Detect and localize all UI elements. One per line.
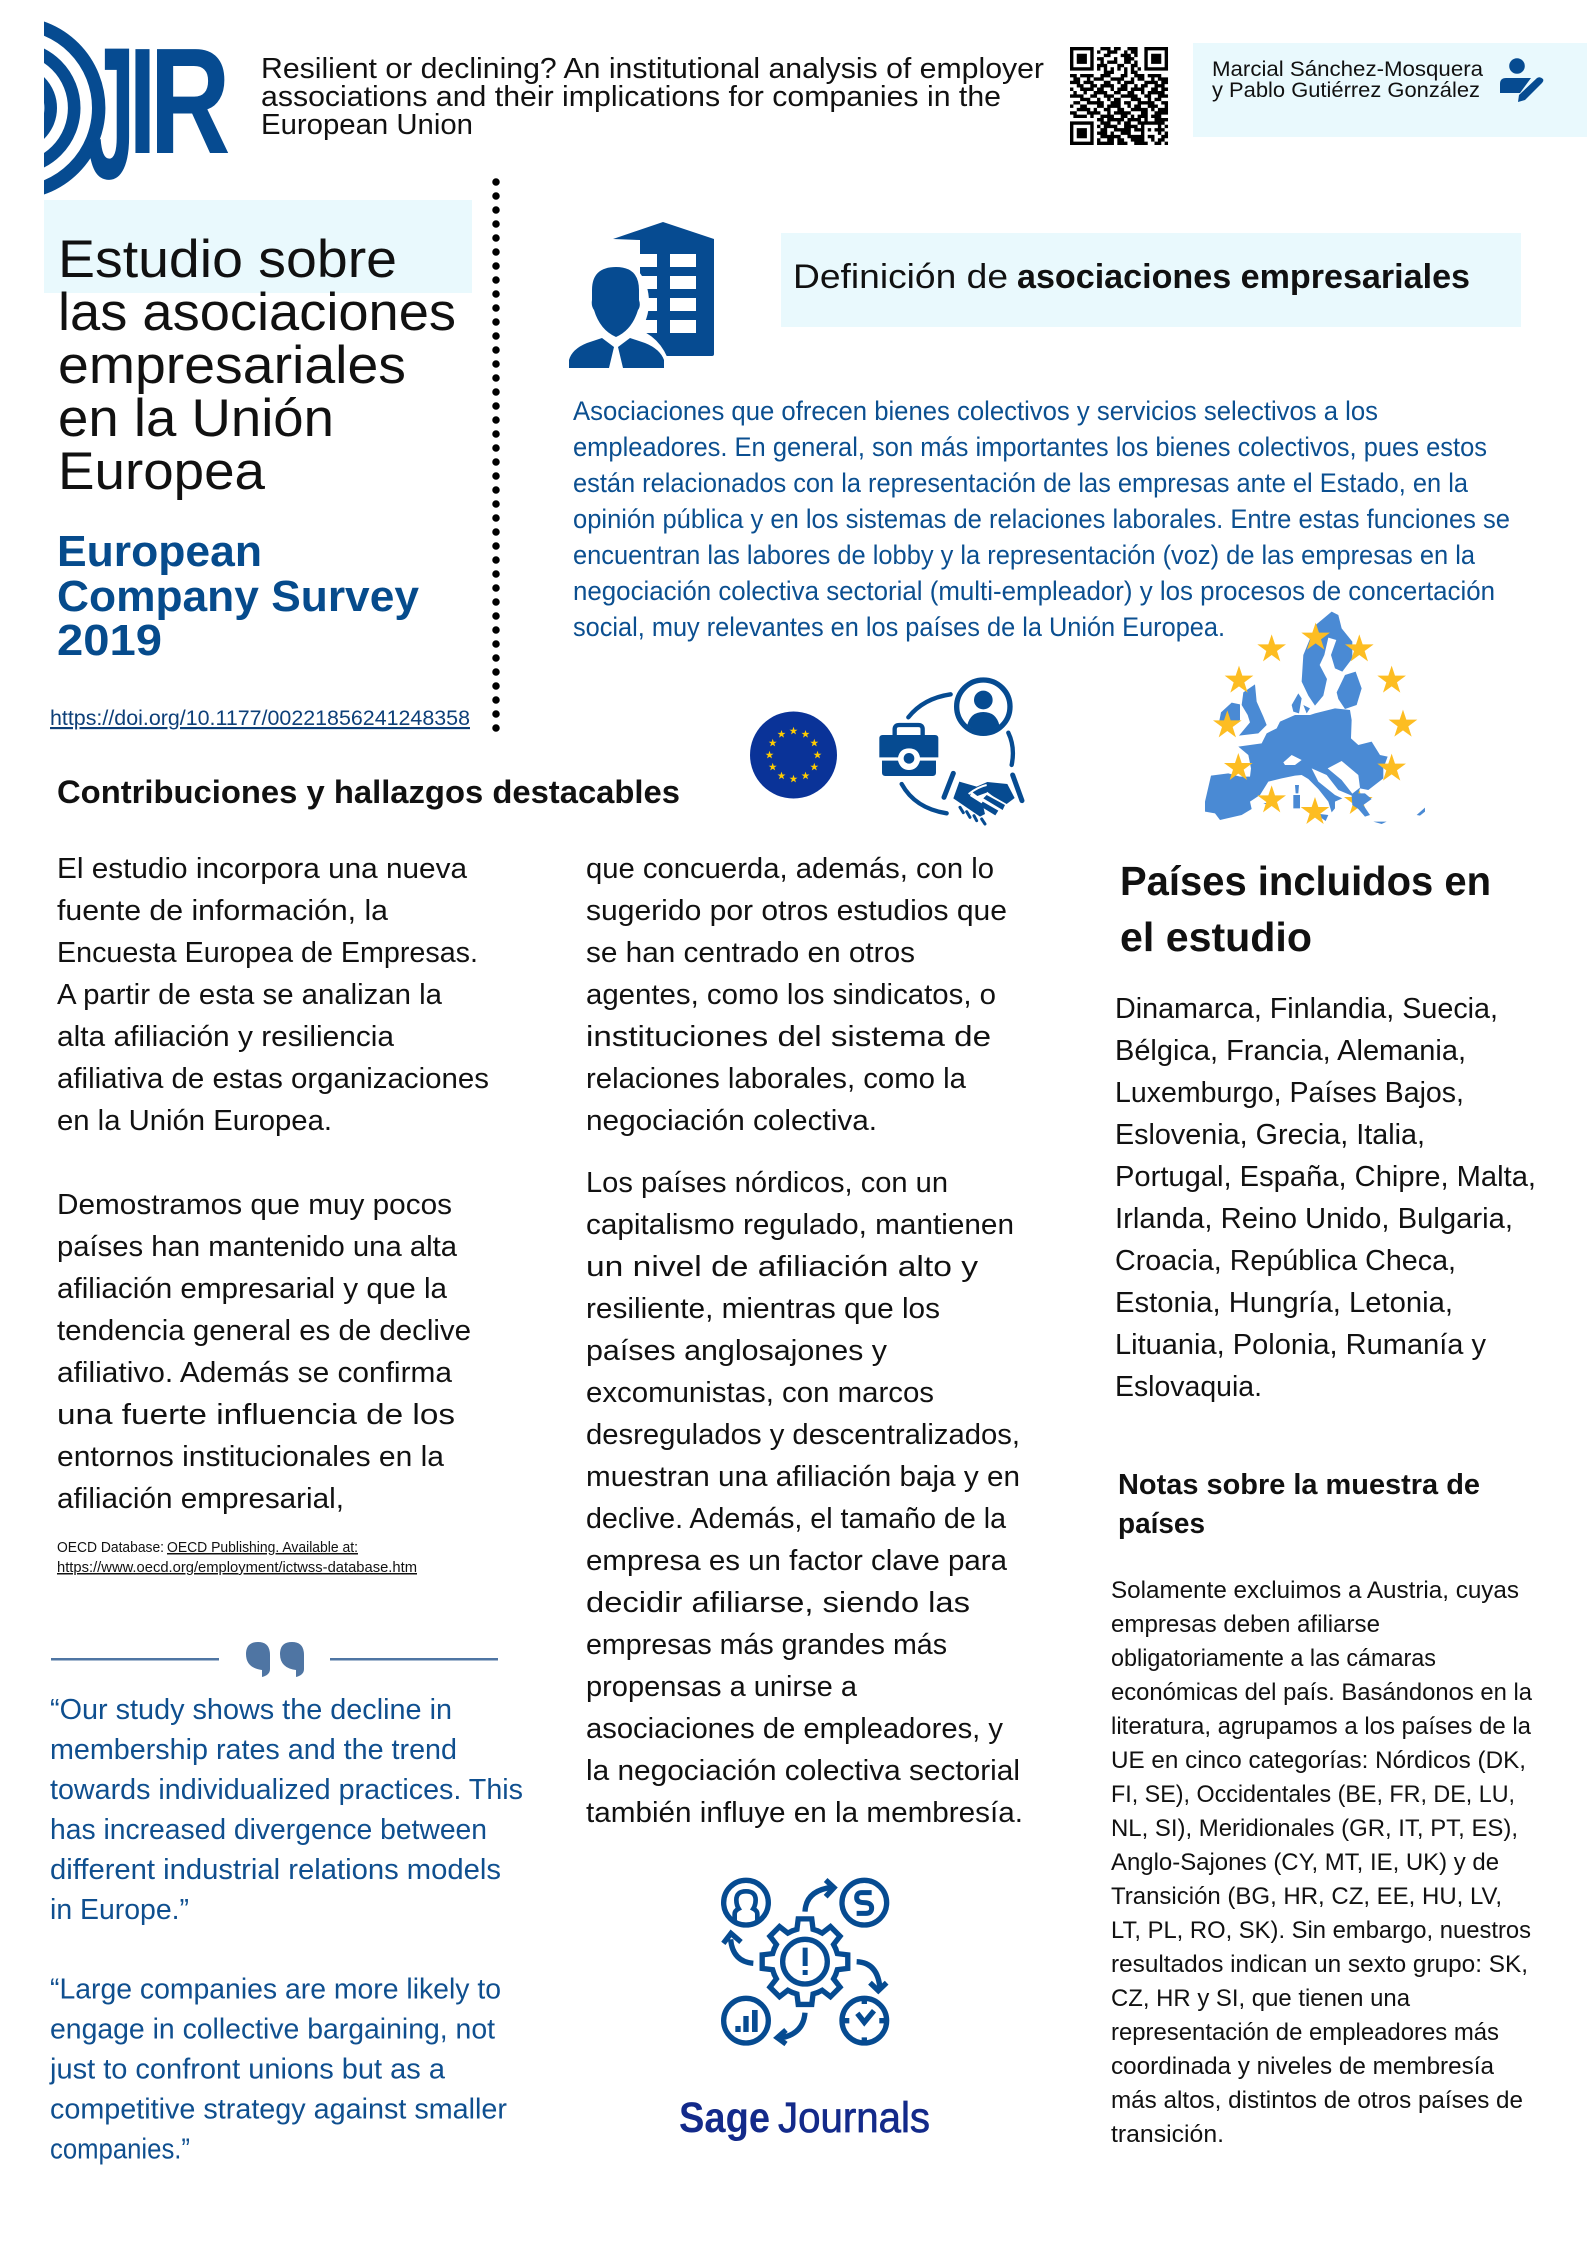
text block: column 2: propensas a unirse a [586,1671,858,1703]
subtitle: European Company Survey 2019: Company Survey [57,572,420,621]
subtitle: European Company Survey 2019: 2019 [57,616,162,665]
panel: main title: las asociaciones [58,283,456,342]
text block: column 2: capitalismo regulado, mantienen [586,1209,1014,1241]
quote block: towards individualized practices. This [50,1774,523,1806]
text block: column 2: empresas más grandes más [586,1629,947,1661]
text block: column 1 [57,853,489,1515]
quote block: has increased divergence between [50,1814,487,1846]
panel: main title: empresariales [58,336,406,395]
text block: column 2: relaciones laborales, como la [586,1063,967,1095]
definition text [573,396,1510,642]
quote block: competitive strategy against smaller [50,2094,507,2126]
panel: authors [1193,43,1587,137]
heading: notas: Notas sobre la muestra de [1118,1469,1480,1501]
text block: countries: Dinamarca, Finlandia, Suecia, [1115,993,1498,1025]
logo: JIR: I [122,16,163,185]
text block: notes: transición. [1111,2121,1224,2148]
text block: column 1: alta afiliación y resiliencia [57,1021,395,1053]
panel: main title [44,200,472,501]
text block: column 1: entornos institucionales en la [57,1441,445,1473]
definition text: empleadores. En general, son más importantes los bienes colectivos, pues estos [573,432,1487,462]
text block: countries: Luxemburgo, Países Bajos, [1115,1077,1464,1109]
text block: notes: económicas del país. Basándonos en la [1111,1679,1532,1706]
icon: gear with four circles [723,1880,887,2044]
text block: countries: Lituania, Polonia, Rumanía y [1115,1329,1486,1361]
source note: OECD [57,1539,417,1576]
text block: notes: coordinada y niveles de membresía [1111,2053,1494,2080]
text block: countries: Estonia, Hungría, Letonia, [1115,1287,1453,1319]
panel: definition heading: Definición de [793,258,1008,296]
article title: associations and their implications for companies in the [261,81,1001,113]
text block: column 2: muestran una afiliación baja y en [586,1461,1020,1493]
text block: column 2: instituciones del sistema de [586,1021,991,1053]
text block: column 2: negociación colectiva. [586,1105,877,1137]
text block: column 1: Demostramos que muy pocos [57,1189,452,1221]
quote block: just to confront unions but as a [49,2054,446,2086]
text block: column 1: tendencia general es de declive [57,1315,471,1347]
heading: notas: países [1118,1508,1205,1540]
panel: main title: en la Unión [58,389,334,448]
text block: notes: Anglo-Sajones (CY, MT, IE, UK) y de [1111,1849,1499,1876]
text block: column 2: sugerido por otros estudios que [586,895,1007,927]
source note: OECD: OECD Database: [57,1539,164,1556]
text block: countries: Portugal, España, Chipre, Malta, [1115,1161,1536,1193]
text block: notes: LT, PL, RO, SK). Sin embargo, nuestros [1111,1917,1531,1944]
text block: column 1: A partir de esta se analizan la [57,979,443,1011]
text block: column 1: afiliación empresarial, [57,1483,344,1515]
definition text: negociación colectiva sectorial (multi-empleador) y los procesos de concertación [573,576,1495,606]
definition text: Asociaciones que ofrecen bienes colectivos y servicios selectivos a los [573,396,1378,426]
text block: notes: Solamente excluimos a Austria, cuyas [1111,1577,1519,1604]
quote block: “Large companies are more likely to [50,1974,501,2006]
panel: authors: y Pablo Gutiérrez González [1212,78,1480,102]
text block: column 2: un nivel de afiliación alto y [586,1251,979,1283]
source note: OECD: OECD Publishing. Available at: [167,1539,358,1556]
text block: column 2: declive. Además, el tamaño de la [586,1503,1007,1535]
text block: column 2: también influye en la membresía. [586,1797,1023,1829]
definition text: social, muy relevantes en los países de la Unión Europea. [573,612,1225,642]
text block: column 1: fuente de información, la [57,895,389,927]
text block: column 2: excomunistas, con marcos [586,1377,934,1409]
definition text: opinión pública y en los sistemas de relaciones laborales. Entre estas funciones se [573,504,1510,534]
icon: person with pen [1500,58,1543,102]
text block: notes: obligatoriamente a las cámaras [1111,1645,1436,1672]
quote block: companies.” [50,2134,190,2166]
quote block: in Europe.” [50,1894,189,1926]
text block: notes [1111,1577,1532,2148]
text block: column 1: afiliación empresarial y que la [57,1273,448,1305]
text block: notes: FI, SE), Occidentales (BE, FR, DE, LU, [1111,1781,1515,1808]
quote block: “Our study shows the decline in [50,1694,452,1726]
logo: Sage Journals: Journals [778,2094,930,2142]
text block: countries [1115,993,1536,1403]
text block: countries: Croacia, República Checa, [1115,1245,1456,1277]
panel: main title: Estudio sobre [58,230,397,289]
DOI link: https://doi.org/10.1177/00221856241248358 [50,706,470,730]
text block: column 2: la negociación colectiva sectorial [586,1755,1020,1787]
text block: countries: Bélgica, Francia, Alemania, [1115,1035,1466,1067]
QR code [1070,49,1168,143]
text block: column 2: empresa es un factor clave para [586,1545,1008,1577]
heading: países incluidos: el estudio [1120,914,1312,960]
text block: column 2 [586,853,1023,1829]
quote block: membership rates and the trend [50,1734,457,1766]
subtitle: European Company Survey 2019 [57,527,420,665]
icon: EU flag [750,712,837,798]
text block: column 2: resiliente, mientras que los [586,1293,940,1325]
text block: column 2: asociaciones de empleadores, y [586,1713,1003,1745]
icon: map of Europe with stars [1205,612,1425,824]
text block: column 2: se han centrado en otros [586,937,915,969]
panel: definition heading [781,233,1521,327]
subtitle: European Company Survey 2019: European [57,527,262,576]
text block: countries: Eslovaquia. [1115,1371,1262,1403]
quote block: engage in collective bargaining, not [50,2014,495,2046]
article title: Resilient or declining? An institutional analysis of employer [261,53,1044,85]
text block: notes: UE en cinco categorías: Nórdicos (DK, [1111,1747,1526,1774]
text block: column 2: Los países nórdicos, con un [586,1167,948,1199]
text block: notes: literatura, agrupamos a los países de la [1111,1713,1531,1740]
logo: JIR: J [87,8,135,218]
text block: notes: Transición (BG, HR, CZ, EE, HU, LV, [1111,1883,1502,1910]
text block: countries: Eslovenia, Grecia, Italia, [1115,1119,1425,1151]
text block: column 2: países anglosajones y [586,1335,888,1367]
text block: column 1: en la Unión Europea. [57,1105,332,1137]
text block: notes: CZ, HR y SI, que tienen una [1111,1985,1410,2012]
definition text: encuentran las labores de lobby y la representación (voz) de las empresas en la [573,540,1475,570]
icon: person, briefcase and handshake [879,680,1022,824]
heading: contribuciones: Contribuciones y hallazgos destacables [57,774,680,810]
panel: definition heading: asociaciones empresariales [1017,258,1470,296]
text block: notes: resultados indican un sexto grupo: SK, [1111,1951,1528,1978]
text block: notes: representación de empleadores más [1111,2019,1499,2046]
text block: column 2: desregulados y descentralizados, [586,1419,1020,1451]
text block: column 1: El estudio incorpora una nueva [57,853,468,885]
definition text: están relacionados con la representación de las empresas ante el Estado, en la [573,468,1468,498]
heading: países incluidos: Países incluidos en [1120,858,1491,904]
logo: JIR: R [150,16,230,185]
logo: Sage Journals: Sage [679,2094,770,2142]
quote block: different industrial relations models [50,1854,501,1886]
text block: column 1: países han mantenido una alta [57,1231,458,1263]
logo: Sage Journals [679,2094,930,2142]
text block: countries: Irlanda, Reino Unido, Bulgaria, [1115,1203,1513,1235]
text block: notes: más altos, distintos de otros países de [1111,2087,1523,2114]
heading: notas [1118,1469,1480,1540]
text block: column 2: decidir afiliarse, siendo las [586,1587,970,1619]
icon: person and building [560,222,714,372]
text block: column 2: que concuerda, además, con lo [586,853,994,885]
text block: column 1: una fuerte influencia de los [57,1399,455,1431]
panel: main title: Europea [58,442,266,501]
text block: notes: NL, SI), Meridionales (GR, IT, PT, ES), [1111,1815,1518,1842]
text block: column 1: afiliativo. Además se confirma [57,1357,453,1389]
heading: países incluidos [1120,858,1491,960]
article title [261,53,1044,141]
icon: quotation marks with rules [51,1642,498,1677]
text block: column 1: Encuesta Europea de Empresas. [57,937,478,969]
text block: column 1: afiliativa de estas organizaciones [57,1063,489,1095]
source note: OECD: https://www.oecd.org/employment/ictwss-database.htm [57,1559,417,1576]
quote block [49,1694,523,2166]
text block: notes: empresas deben afiliarse [1111,1611,1380,1638]
article title: European Union [261,109,473,141]
panel: authors: Marcial Sánchez-Mosquera [1212,57,1483,81]
text block: column 2: agentes, como los sindicatos, o [586,979,996,1011]
logo: JIR [44,22,228,194]
